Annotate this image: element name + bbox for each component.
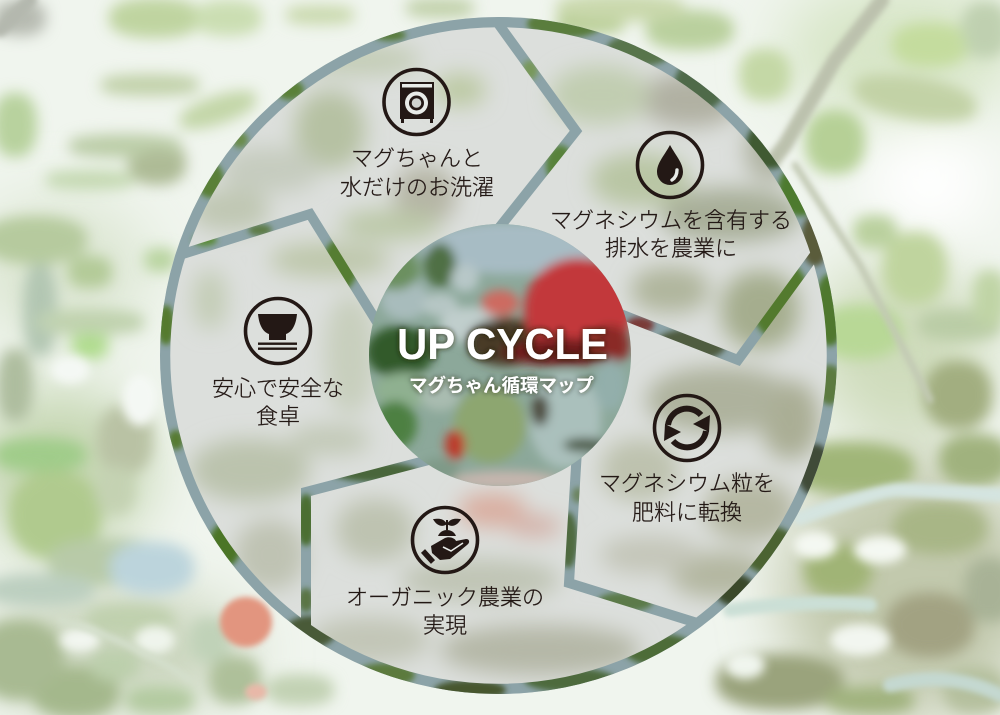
segment: fertilizer bbox=[599, 396, 775, 525]
label: safe table: 安心で安全な bbox=[212, 376, 344, 401]
segment: magnesium water bbox=[550, 132, 792, 261]
outer ring and arrow dividers bbox=[160, 17, 837, 694]
segment: laundry bbox=[340, 70, 494, 200]
label: laundry: マグちゃんと bbox=[351, 146, 483, 171]
center circle with tomato photo bbox=[366, 222, 632, 489]
title: UP CYCLE: UP CYCLE bbox=[397, 320, 608, 369]
icon: washing machine bbox=[384, 70, 449, 134]
label: fertilizer: 肥料に転換 bbox=[632, 500, 742, 525]
label: organic farming: 実現 bbox=[423, 613, 467, 638]
label: organic farming: オーガニック農業の bbox=[346, 585, 544, 610]
segment: safe table bbox=[212, 298, 344, 429]
label: fertilizer: マグネシウム粒を bbox=[599, 471, 775, 496]
segment: organic farming bbox=[346, 508, 544, 638]
circle panels: frosted segments bbox=[170, 25, 837, 684]
label: magnesium water: 排水を農業に bbox=[605, 236, 737, 261]
icon: rice bowl bbox=[246, 298, 310, 364]
icon: cycle arrows bbox=[654, 396, 720, 460]
label: laundry: 水だけのお洗濯 bbox=[340, 175, 494, 200]
center title bbox=[397, 320, 608, 396]
label: safe table: 食卓 bbox=[256, 404, 300, 429]
icon: hand with sprout bbox=[412, 508, 478, 572]
subtitle: マグちゃん循環マップ bbox=[409, 375, 594, 396]
icon: water drop bbox=[638, 132, 702, 198]
label: magnesium water: マグネシウムを含有する bbox=[550, 208, 792, 233]
